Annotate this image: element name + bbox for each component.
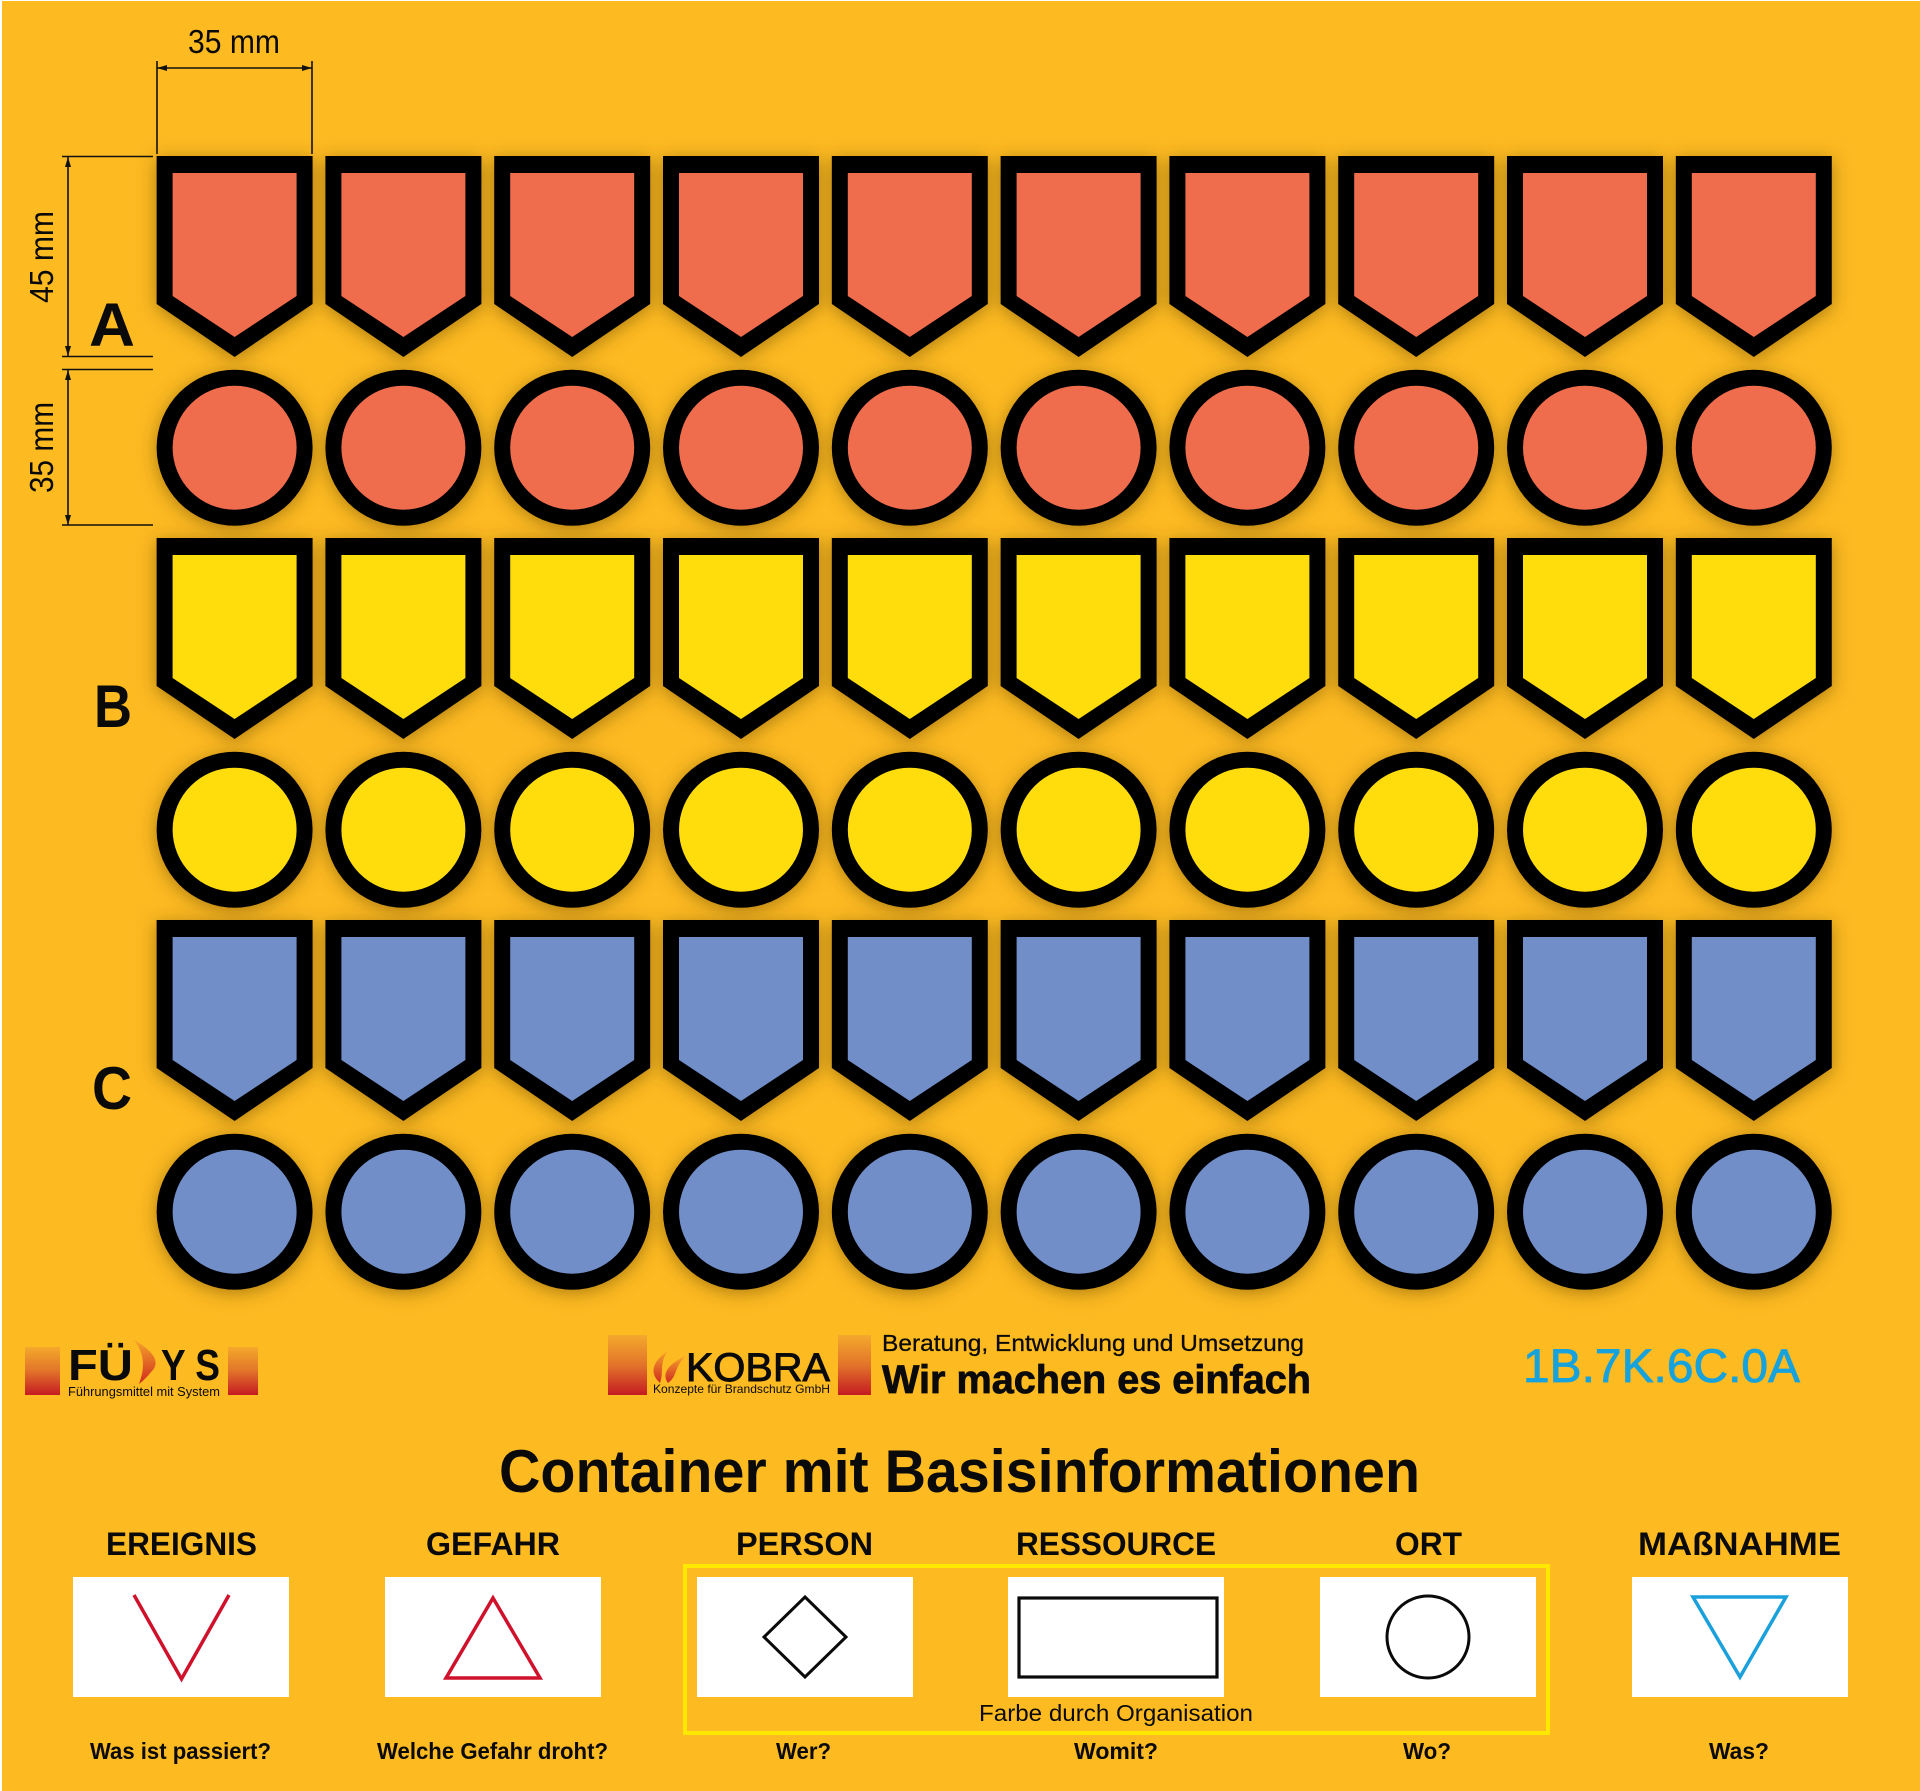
frame: Farbe durch Organisation (685, 1566, 1548, 1733)
column: Person: Wer? (776, 1738, 831, 1764)
column: Ort: ORT (1395, 1526, 1462, 1562)
column: Ereignis: EREIGNIS (106, 1526, 257, 1562)
code: 1B.7K.6C.0A (1523, 1339, 1801, 1392)
dimension: height 45 mm (23, 156, 153, 356)
row label B: B (94, 673, 132, 740)
row C: blue shields (157, 920, 1832, 1121)
row label C: C (92, 1055, 132, 1122)
column: Person: PERSON (736, 1526, 873, 1562)
logo: FueSys: Y S (161, 1341, 220, 1390)
logo: Kobra (608, 1335, 871, 1396)
slogan: Wir machen es einfach (882, 1358, 1311, 1402)
dimension: width 35 mm (157, 23, 312, 154)
logo: Kobra: KOBRA (686, 1346, 830, 1390)
row A: red circles (157, 370, 1832, 526)
column: Person (697, 1526, 913, 1764)
column: Gefahr: GEFAHR (426, 1526, 560, 1562)
column: Ort: Wo? (1403, 1738, 1451, 1764)
column: Massnahme: Was? (1709, 1738, 1769, 1764)
dimension: height 35 mm (23, 370, 153, 525)
column: Gefahr: Welche Gefahr droht? (377, 1738, 608, 1764)
column: Ressource (1008, 1526, 1224, 1764)
row label A: A (89, 291, 135, 359)
column: Gefahr (377, 1526, 608, 1764)
column: Ereignis (73, 1526, 289, 1764)
title: Container mit Basisinformationen (499, 1438, 1420, 1505)
slogan (882, 1330, 1311, 1402)
dimension: height 35 mm: 35 mm (23, 402, 60, 493)
row C: blue circles (157, 1134, 1832, 1290)
dimension: height 45 mm: 45 mm (23, 211, 60, 303)
logo: FueSys: FÜ (68, 1341, 133, 1390)
column: Massnahme: MAßNAHME (1638, 1526, 1841, 1562)
row A: red shields (157, 156, 1832, 357)
logo: FueSys (25, 1340, 258, 1399)
dimension: width 35 mm: 35 mm (188, 23, 280, 60)
column: Massnahme (1632, 1526, 1848, 1764)
column: Ereignis: Was ist passiert? (90, 1738, 271, 1764)
logo: FueSys: Führungsmittel mit System (68, 1384, 220, 1399)
row B: yellow shields (157, 538, 1832, 739)
logo: Kobra: Konzepte für Brandschutz GmbH (653, 1382, 830, 1396)
column: Ort (1320, 1526, 1536, 1764)
slogan: Beratung, Entwicklung und Umsetzung (882, 1330, 1304, 1356)
column: Ressource: RESSOURCE (1016, 1526, 1216, 1562)
row B: yellow circles (157, 752, 1832, 908)
column: Ressource: Womit? (1074, 1738, 1158, 1764)
frame: Farbe durch Organisation: Farbe durch Organisation (979, 1700, 1253, 1726)
